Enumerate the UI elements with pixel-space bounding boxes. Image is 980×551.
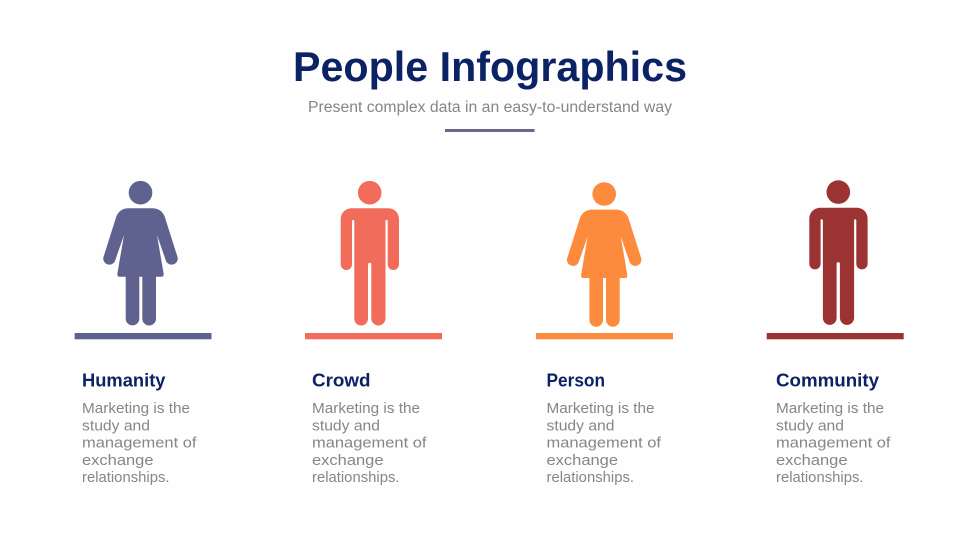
body text: study and (82, 418, 150, 434)
icon: man figure, dark red (809, 180, 868, 325)
body text: relationships. (546, 470, 634, 486)
icon: woman figure, orange (567, 182, 641, 327)
base bar (767, 333, 904, 339)
body text: relationships. (82, 470, 170, 486)
panel: Person (536, 182, 673, 486)
heading: Humanity (82, 370, 166, 390)
body text: Marketing is the (546, 401, 654, 417)
body text: exchange (546, 453, 618, 469)
heading: Community (776, 370, 879, 390)
body text: Marketing is the (82, 401, 190, 417)
title underline (445, 129, 534, 132)
heading: Person (546, 370, 605, 390)
body text: study and (312, 418, 380, 434)
body text: study and (776, 418, 844, 434)
body text: exchange (776, 453, 848, 469)
panel: Community (767, 180, 904, 486)
body text: management of (82, 436, 198, 452)
panel: Humanity (75, 181, 212, 486)
body text: management of (546, 436, 662, 452)
body text (776, 401, 892, 486)
body text: exchange (312, 453, 384, 469)
body text: management of (312, 436, 428, 452)
body text: study and (546, 418, 614, 434)
body text (82, 401, 198, 486)
subtitle: Present complex data in an easy-to-understand way (308, 99, 672, 116)
base bar (75, 333, 212, 339)
body text: Marketing is the (776, 401, 884, 417)
icon: woman figure, slate (103, 181, 178, 325)
body text: management of (776, 436, 892, 452)
body text: relationships. (312, 470, 400, 486)
body text: Marketing is the (312, 401, 420, 417)
body text (546, 401, 662, 486)
heading: Crowd (312, 370, 370, 390)
base bar (536, 333, 673, 339)
title: People Infographics (293, 43, 687, 90)
body text: relationships. (776, 470, 864, 486)
body text (312, 401, 428, 486)
base bar (305, 333, 442, 339)
icon: man figure, coral (341, 181, 399, 326)
body text: exchange (82, 453, 154, 469)
panel: Crowd (305, 181, 442, 486)
